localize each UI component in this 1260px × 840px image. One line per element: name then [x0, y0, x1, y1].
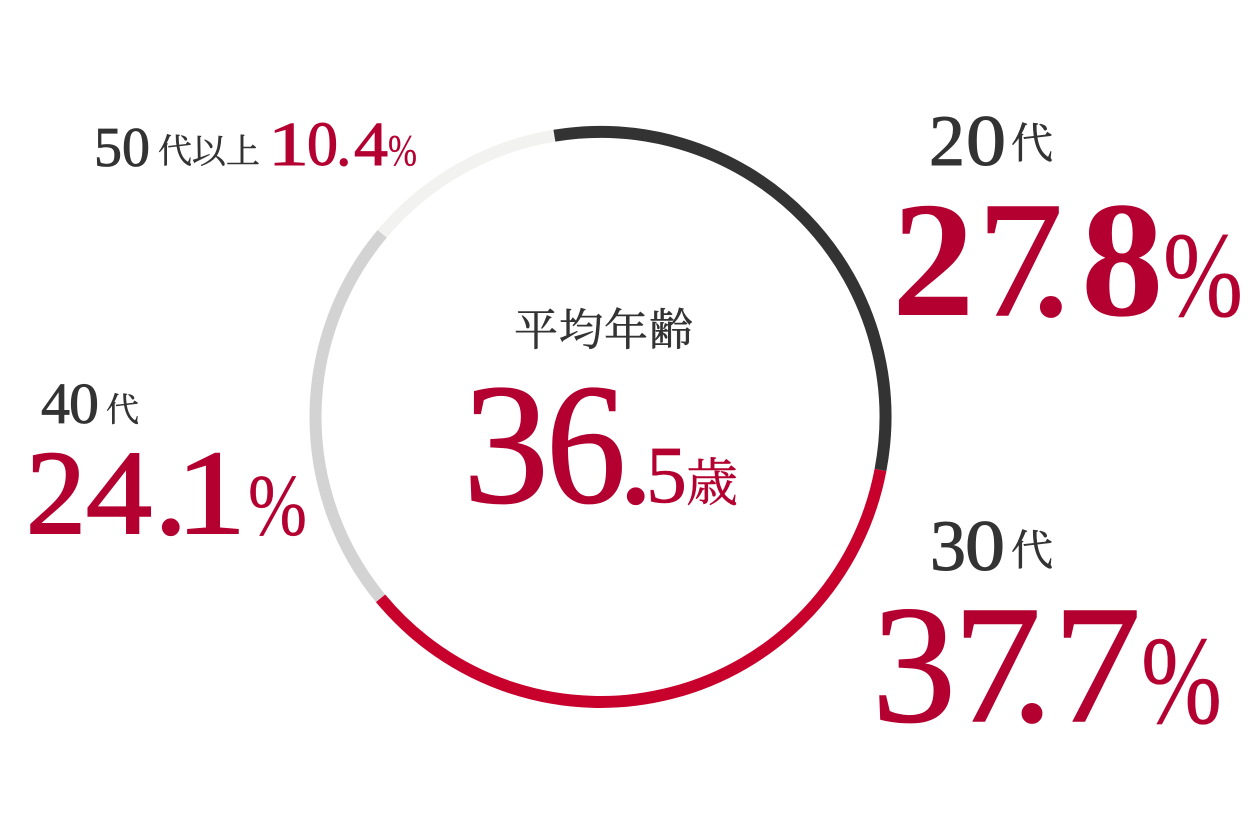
value: 36.5 years: [463, 350, 738, 540]
label: 30s: 0: [965, 506, 1005, 586]
value: 36.5 years: 3: [463, 350, 549, 540]
segment: 50s and over: [382, 136, 554, 234]
value: 10.4%: %: [388, 126, 417, 175]
value: 27.8%: [892, 168, 1243, 351]
value: 10.4%: 4: [354, 111, 388, 179]
label: 50s and over: [94, 111, 417, 179]
label: 40s: [26, 371, 307, 567]
segment: 30s: [381, 470, 880, 702]
value: 24.1%: %: [248, 458, 307, 555]
label: 30s: [872, 506, 1222, 758]
value: 24.1%: 2: [26, 426, 86, 559]
value: 10.4%: 1: [268, 111, 309, 179]
label: 40s: 代: [106, 392, 139, 429]
value: 36.5 years: 5: [646, 429, 687, 520]
value: 10.4%: 0: [307, 111, 338, 179]
value: 27.8%: 8: [1081, 168, 1164, 351]
value: 37.7%: %: [1141, 612, 1222, 751]
value: 10.4%: .: [336, 111, 352, 179]
value: 37.7%: .: [1011, 572, 1053, 758]
center label: average age: [463, 306, 738, 540]
segment: 40s: [316, 234, 382, 598]
value: 37.7%: 7: [1053, 572, 1141, 758]
label: 50s and over: 5: [94, 117, 122, 179]
value: 24.1%: [26, 401, 307, 567]
value: 36.5 years: .: [617, 370, 654, 536]
value: 36.5 years: 歳: [686, 456, 738, 513]
value: 27.8%: 2: [892, 168, 974, 351]
label: 20s: 0: [966, 101, 1006, 181]
value: 37.7%: 7: [953, 572, 1041, 758]
label: 50s and over: 代以上: [158, 133, 260, 171]
label: 20s: 2: [929, 101, 965, 181]
value: 24.1%: 4: [86, 426, 152, 559]
value: 37.7%: 3: [872, 572, 956, 758]
segment: 20s: [554, 132, 885, 470]
label: 20s: 代: [1011, 122, 1053, 168]
donut chart: [316, 132, 885, 702]
value: 37.7%: [872, 572, 1222, 758]
value: 10.4%: [268, 111, 417, 179]
value: 24.1%: .: [152, 401, 190, 567]
value: 27.8%: 7: [977, 168, 1063, 351]
value: 27.8%: .: [1034, 197, 1068, 346]
value: 24.1%: 1: [176, 426, 246, 559]
label: 30s: 代: [1011, 529, 1053, 575]
label: 50s and over: 0: [122, 117, 150, 179]
label: 20s: [892, 101, 1243, 351]
heading: average age: 平均年齢: [514, 306, 694, 355]
label: 30s: 3: [930, 506, 966, 586]
value: 36.5 years: 6: [546, 350, 626, 540]
label: 40s: 0: [69, 371, 99, 436]
label: 40s: 4: [41, 371, 70, 436]
